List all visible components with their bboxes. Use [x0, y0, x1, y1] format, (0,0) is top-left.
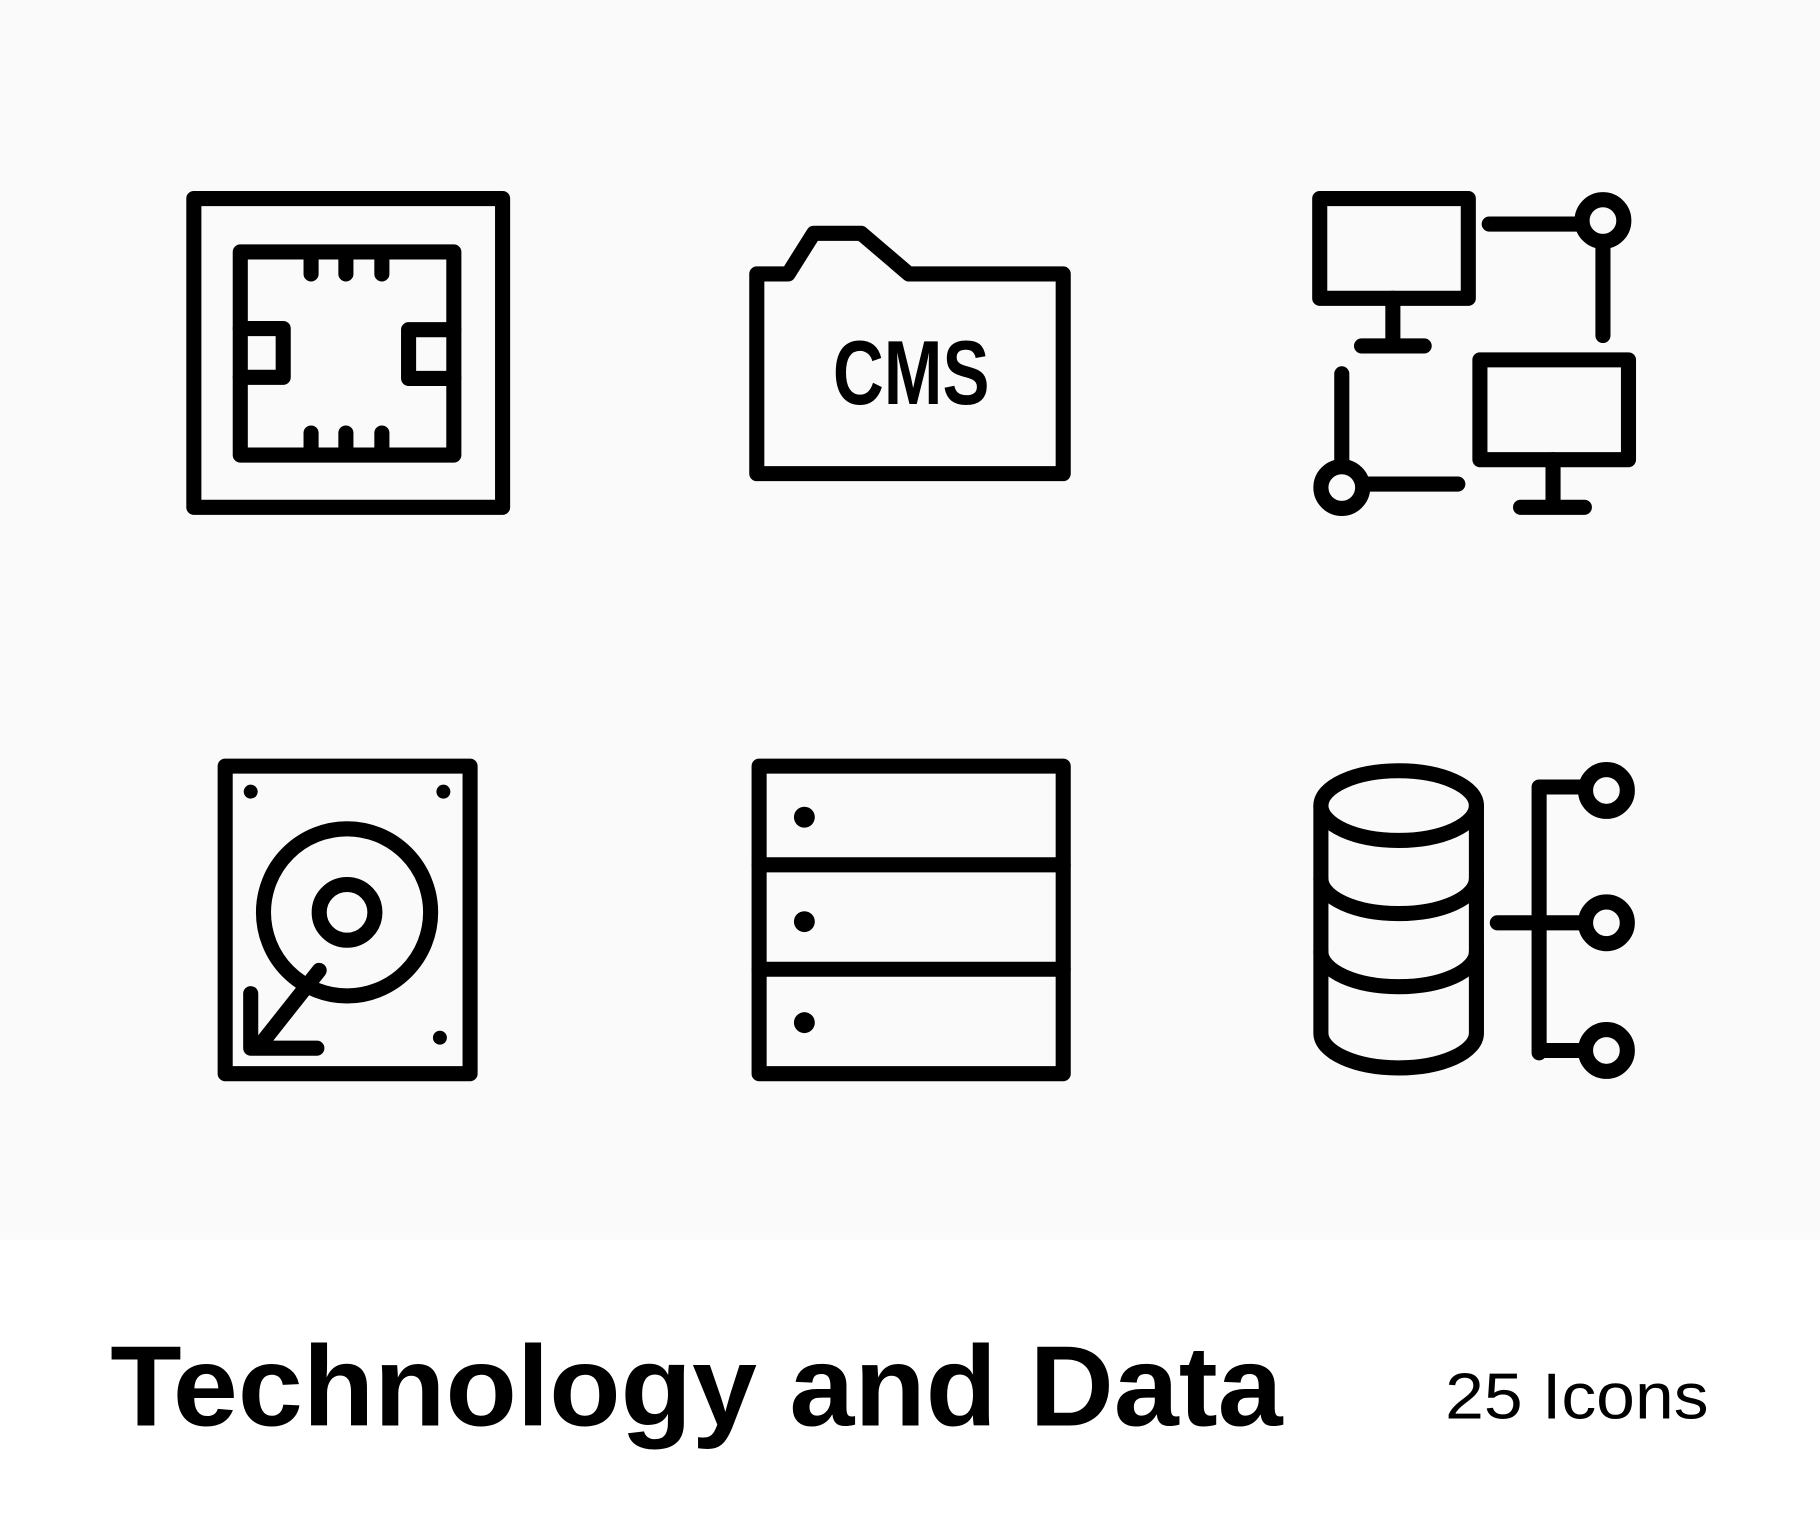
icon: database network [1321, 770, 1627, 1071]
icon count: 25 Icons [1445, 1359, 1709, 1432]
icon: network monitors [1320, 199, 1628, 508]
icon: hard drive [225, 766, 470, 1074]
icon: CMS folder: CMS [833, 323, 990, 424]
icon: chip board [194, 199, 503, 507]
title: Technology and Data [110, 1323, 1283, 1450]
icon: CMS folder [757, 233, 1063, 474]
icon: server stack [759, 766, 1063, 1074]
